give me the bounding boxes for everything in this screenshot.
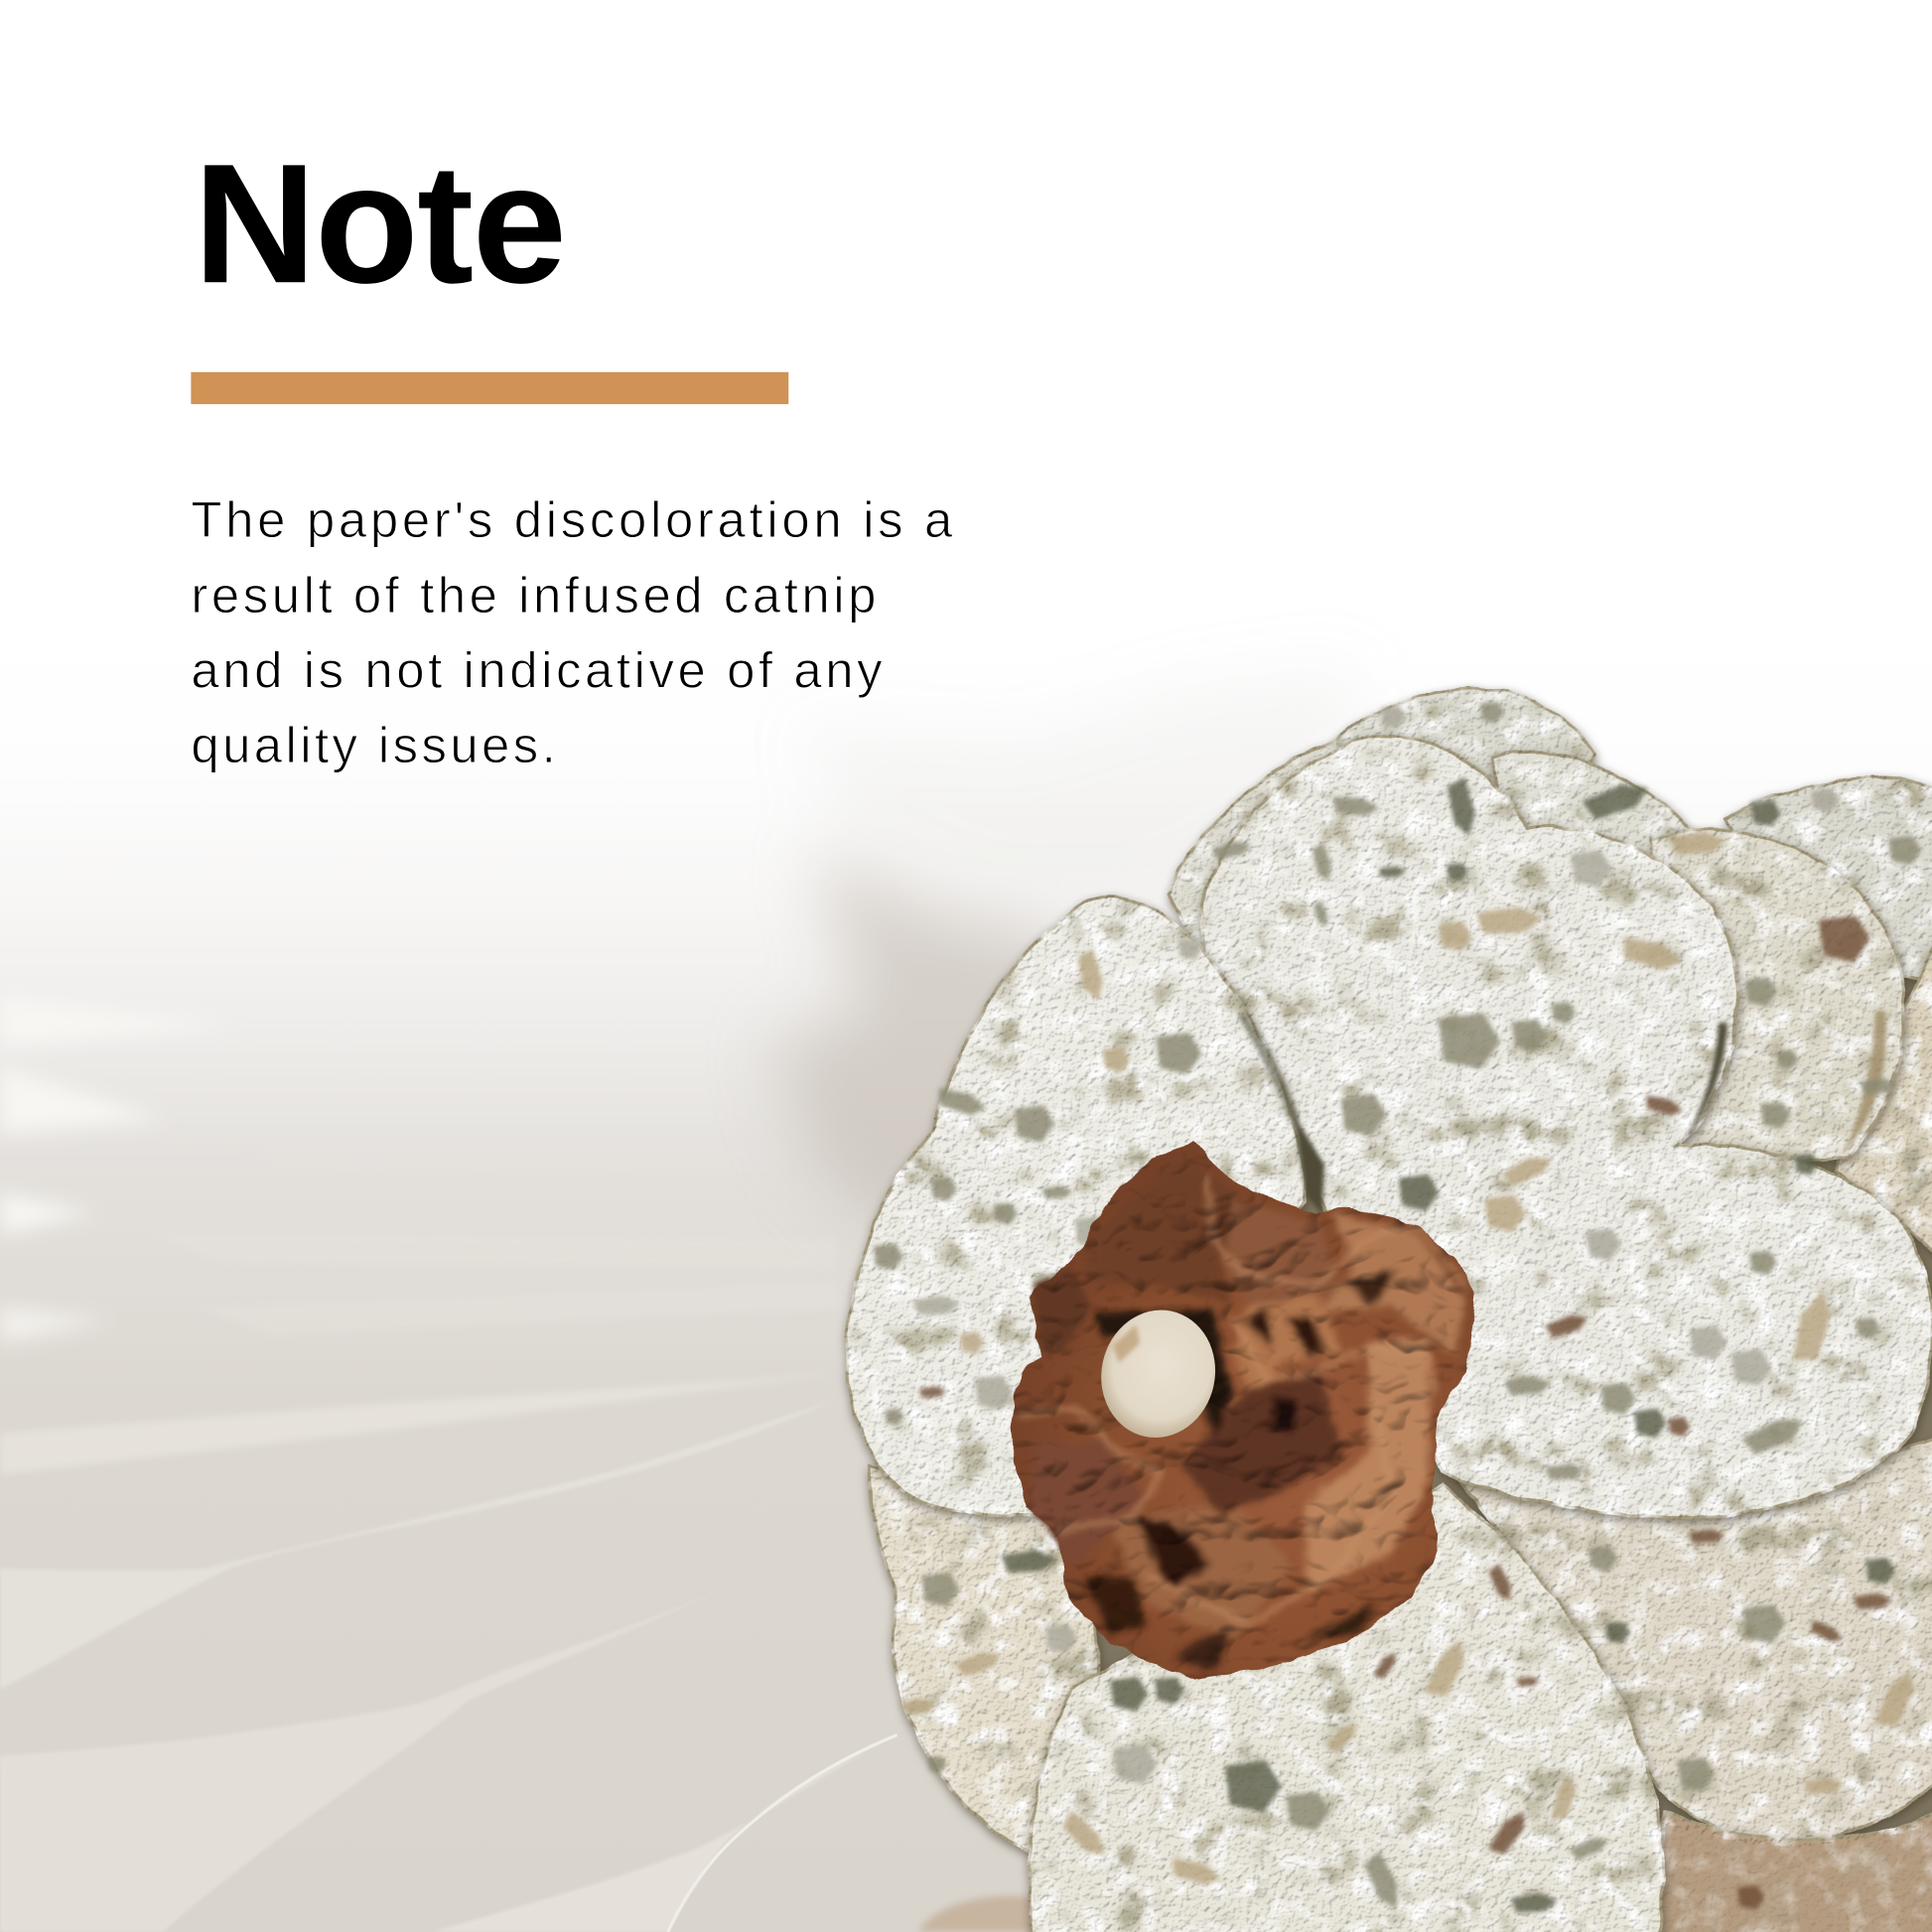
petal tint: brown overlay on far right petal bbox=[1657, 1821, 1932, 1932]
body text: The paper's discoloration is a bbox=[191, 491, 953, 548]
specks: plant flecks embedded in the paper bbox=[874, 701, 1923, 1913]
petal: left heart bbox=[846, 897, 1307, 1515]
title: Note bbox=[194, 129, 567, 319]
petal: top back bbox=[1337, 689, 1595, 863]
flower bbox=[846, 689, 1932, 1932]
dark shadow folds between petals bbox=[1238, 1011, 1886, 1213]
accent bar bbox=[191, 372, 788, 404]
petal: bottom right bbox=[1453, 1436, 1932, 1845]
body text bbox=[191, 491, 953, 773]
flower centre: dried brown bud bbox=[1009, 1142, 1476, 1680]
petal: central heart bbox=[1201, 736, 1932, 1518]
body text: quality issues. bbox=[191, 717, 556, 773]
background: blurred grey-brown foliage behind flower bbox=[770, 665, 1355, 1244]
petal: bottom large bbox=[1030, 1484, 1663, 1932]
bud crumpled body bbox=[1009, 1142, 1476, 1680]
petal: bottom far right brown bbox=[1651, 1811, 1932, 1932]
flower backing shadow bbox=[986, 788, 1932, 1872]
body text: and is not indicative of any bbox=[191, 642, 883, 699]
petal: right middle bbox=[1651, 830, 1904, 1165]
background: blurred pale rays on the left bbox=[0, 996, 1035, 1932]
seed bbox=[1089, 1300, 1227, 1449]
body text: result of the infused catnip bbox=[191, 567, 876, 623]
petal: back left shoulder bbox=[1169, 740, 1355, 1023]
petal: far right back bbox=[1725, 777, 1932, 986]
petal: upper right back bbox=[1491, 753, 1698, 888]
petal: right edge bbox=[1836, 936, 1932, 1257]
petal: lower left bbox=[869, 1466, 1109, 1855]
